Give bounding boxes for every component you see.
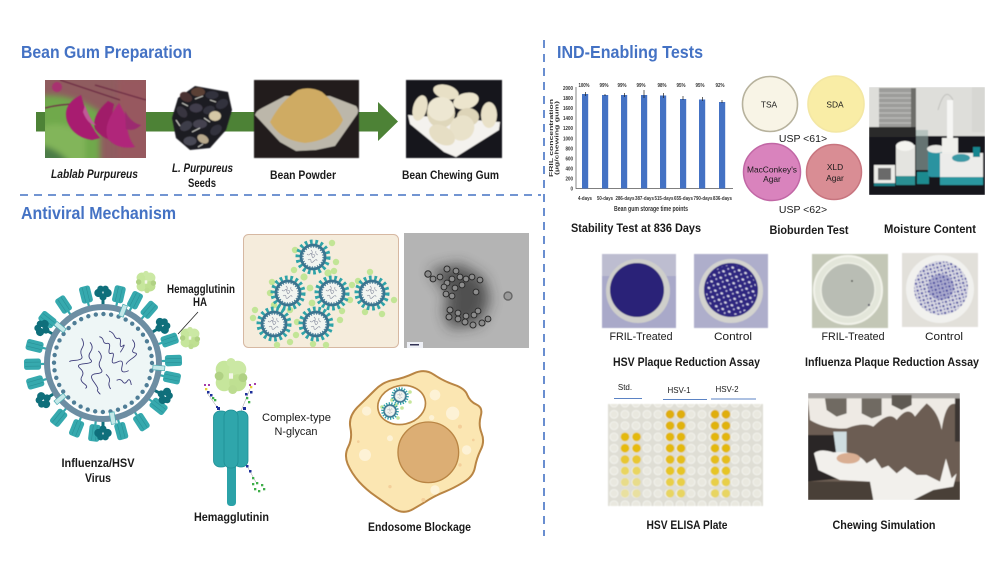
plate: XLD Agar: Agar <box>826 173 844 183</box>
y axis ticks: 1400 <box>563 116 573 122</box>
photo: bean chewing gum <box>406 80 502 158</box>
label: Bean Chewing Gum: Bean Chewing Gum <box>402 169 499 182</box>
photo: Lablab purpureus plant <box>45 80 146 158</box>
label: Lablab Purpureus: Lablab Purpureus <box>51 168 138 181</box>
label: Bioburden Test: Bioburden Test <box>770 224 849 237</box>
category labels: 286-days <box>616 196 634 202</box>
plate: XLD Agar <box>806 144 862 200</box>
divider: vertical dashed <box>543 40 545 536</box>
category labels: 655-days <box>674 196 693 202</box>
photo: moisture content instrument <box>869 87 985 195</box>
photo: influenza control well <box>902 253 978 327</box>
label: Chewing Simulation: Chewing Simulation <box>832 519 936 532</box>
y axis ticks: 600 <box>566 156 573 162</box>
y axis ticks <box>563 86 573 192</box>
label: Influenza/HSV Virus <box>62 457 135 485</box>
percent labels: 95% <box>696 83 705 89</box>
y axis ticks: 1200 <box>563 126 573 132</box>
photo: HSV FRIL-treated well <box>602 254 676 328</box>
category labels: 50-days <box>597 196 613 202</box>
percent labels: 98% <box>658 83 667 89</box>
error bars <box>586 90 722 103</box>
label: USP 62: USP <62> <box>779 204 827 216</box>
label: Complex-type N-glycan: Complex-type <box>262 412 331 424</box>
label: Hemagglutinin: Hemagglutinin <box>194 511 269 524</box>
label: FRIL-Treated influenza: FRIL-Treated <box>822 331 884 343</box>
endosome virions <box>380 388 412 420</box>
label: Control HSV: Control <box>714 331 752 343</box>
percent labels: 95% <box>676 83 686 89</box>
label: Influenza/HSV Virus: Virus <box>85 472 111 485</box>
label: Hemagglutinin HA <box>167 283 235 309</box>
bars <box>582 94 725 188</box>
percent labels: 99% <box>618 83 627 89</box>
y axis ticks: 1000 <box>563 136 573 142</box>
y axis ticks: 800 <box>566 146 573 152</box>
chart labels: ELISA plate groups: HSV-2 <box>715 385 739 394</box>
label: Hemagglutinin HA: HA <box>193 296 208 309</box>
heading: Antiviral Mechanism: Antiviral Mechanism <box>21 203 176 223</box>
label: Hemagglutinin HA: Hemagglutinin <box>167 283 235 296</box>
y axis label <box>549 98 560 177</box>
category labels: 515-days <box>654 196 674 202</box>
label: Control influenza: Control <box>925 331 963 343</box>
label: Influenza Plaque Reduction Assay: Influenza Plaque Reduction Assay <box>805 356 979 369</box>
stem <box>227 464 236 506</box>
photo: HSV control well <box>694 254 768 328</box>
y axis ticks: 400 <box>566 166 573 172</box>
divider: horizontal dashed <box>20 194 541 196</box>
plate: MacConkey's Agar <box>744 144 800 200</box>
y axis ticks: 0 <box>570 186 573 192</box>
plate: MacConkey's Agar: MacConkey's <box>747 164 797 174</box>
trimer body <box>214 410 248 468</box>
plate: TSA: TSA <box>761 100 778 110</box>
photo: HSV ELISA plate <box>608 404 763 506</box>
category labels: 387-days <box>635 196 654 202</box>
arrow: process flow <box>36 102 398 141</box>
panel: virus aggregate illustration <box>244 234 398 348</box>
photo: electron micrograph <box>404 233 529 348</box>
label: Complex-type N-glycan: N-glycan <box>274 426 318 438</box>
y axis ticks: 200 <box>566 176 573 182</box>
plate: MacConkey's Agar: Agar <box>763 174 781 184</box>
y axis label: FRIL concentration <box>549 98 555 177</box>
category labels: 4-days <box>578 196 592 202</box>
diagram: endosome blockage cell <box>346 371 483 512</box>
percent labels <box>578 83 725 89</box>
label: Complex-type N-glycan <box>262 412 331 438</box>
plate: SDA: SDA <box>826 100 844 110</box>
percent labels: 99% <box>636 83 646 89</box>
label: L. Purpureus Seeds: L. Purpureus <box>172 162 233 175</box>
label: Moisture Content: Moisture Content <box>884 223 976 236</box>
percent labels: 92% <box>716 83 725 89</box>
label: Bean Powder: Bean Powder <box>270 169 336 182</box>
diagram: influenza/HSV virus <box>24 271 200 442</box>
chart labels: ELISA plate groups <box>614 383 756 400</box>
photo: bean powder <box>254 80 359 158</box>
x axis title: Bean gum storage time points <box>614 206 688 213</box>
viral RNA strands <box>70 331 136 394</box>
label: FRIL-Treated HSV: FRIL-Treated <box>610 331 672 343</box>
label: Influenza/HSV Virus: Influenza/HSV <box>62 457 135 470</box>
heading: IND-Enabling Tests: IND-Enabling Tests <box>557 42 703 62</box>
plate: XLD Agar: XLD <box>827 162 843 172</box>
chart labels: ELISA plate groups: Std. <box>618 383 632 392</box>
category labels <box>578 196 732 202</box>
y axis ticks: 2000 <box>563 86 573 92</box>
label: HSV ELISA Plate: HSV ELISA Plate <box>646 519 728 532</box>
percent labels: 100% <box>578 83 590 89</box>
category labels: 790-days <box>694 196 712 202</box>
label: USP 61: USP <61> <box>779 133 827 145</box>
y axis label: (µg/chewing gum) <box>554 101 560 175</box>
photo: chewing simulation <box>808 393 960 500</box>
chart labels: ELISA plate groups: HSV-1 <box>667 386 691 395</box>
y axis ticks: 1600 <box>563 106 573 112</box>
category labels: 836-days <box>713 196 732 202</box>
label: L. Purpureus Seeds: Seeds <box>188 177 216 190</box>
photo: L. purpureus seeds <box>172 86 232 150</box>
percent labels: 99% <box>600 83 609 89</box>
HA glycoprotein blobs <box>136 271 200 349</box>
heading: Bean Gum Preparation: Bean Gum Preparation <box>21 42 192 62</box>
label: HSV Plaque Reduction Assay: HSV Plaque Reduction Assay <box>613 356 760 369</box>
panel: bioburden agar plates <box>742 76 864 216</box>
complex-type N-glycan chains <box>204 383 265 492</box>
label: Endosome Blockage: Endosome Blockage <box>368 521 471 534</box>
leader line: hemagglutinin HA <box>178 312 198 334</box>
bar chart: stability <box>549 83 733 213</box>
label: L. Purpureus Seeds <box>172 162 233 190</box>
label: Stability Test at 836 Days: Stability Test at 836 Days <box>571 222 701 235</box>
photo: influenza FRIL-treated well <box>812 254 888 328</box>
bound lectin protein <box>215 358 247 394</box>
diagram: hemagglutinin with glycans <box>204 358 265 506</box>
y axis ticks: 1800 <box>563 96 573 102</box>
